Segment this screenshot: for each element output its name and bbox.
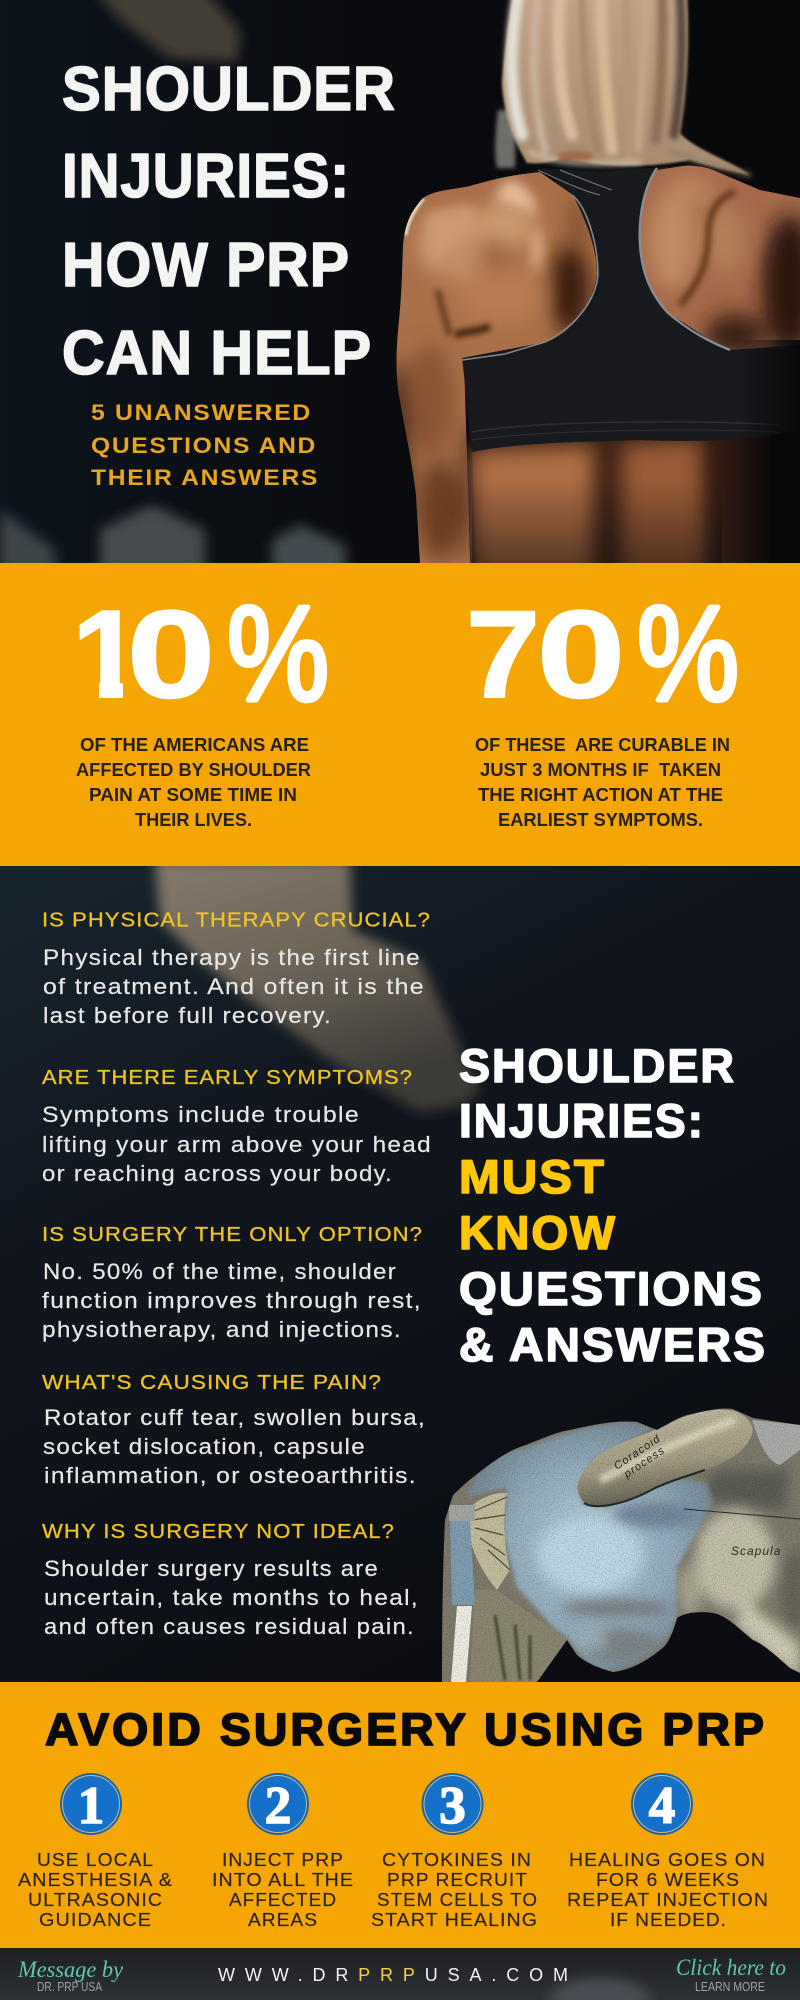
heading: AVOID SURGERY USING PRP — [45, 1704, 767, 1755]
step 2: INTO ALL THE — [212, 1869, 354, 1890]
step 1: USE LOCAL — [37, 1849, 154, 1870]
side heading: & ANSWERS — [459, 1318, 767, 1371]
step 3: STEM CELLS TO — [377, 1889, 538, 1910]
question 3 — [42, 1223, 423, 1342]
message by credit — [17, 1957, 124, 1994]
click here call to action: Click here to — [676, 1955, 786, 1980]
message by credit: Message by — [17, 1957, 124, 1982]
step 2: INJECT PRP — [222, 1849, 344, 1870]
biceps tendon — [450, 1520, 475, 1605]
back skin, right shoulder — [640, 166, 800, 350]
icon: number 3 badge: 3 — [439, 1777, 466, 1835]
panel: questions and answers — [0, 860, 800, 1685]
stat description: curable cases: EARLIEST SYMPTOMS. — [498, 809, 703, 830]
question 4: socket dislocation, capsule — [43, 1434, 366, 1459]
icon: number 1 badge: 1 — [78, 1777, 104, 1835]
footer bokeh — [550, 1978, 650, 2000]
title: CAN HELP — [62, 319, 372, 388]
step 4: HEALING GOES ON — [569, 1849, 766, 1870]
question 5: WHY IS SURGERY NOT IDEAL? — [42, 1520, 395, 1543]
question 4: WHAT'S CAUSING THE PAIN? — [42, 1371, 382, 1394]
stat: 70 percent: 7 — [466, 586, 540, 724]
question 1: of treatment. And often it is the — [43, 974, 425, 999]
website address: WWW.DR PRP USA.COM — [218, 1965, 568, 1985]
title: SHOULDER — [62, 55, 396, 124]
step 3 — [371, 1773, 538, 1930]
question 2: or reaching across your body. — [42, 1161, 393, 1186]
step 4: FOR 6 WEEKS — [596, 1869, 740, 1890]
stat description: Americans affected: PAIN AT SOME TIME IN — [89, 784, 297, 805]
stat: 10 percent: % — [227, 578, 329, 729]
pointer line — [684, 1509, 800, 1519]
subtitle: THEIR ANSWERS — [91, 465, 319, 490]
question 5: Shoulder surgery results are — [44, 1556, 379, 1581]
question 4 — [42, 1371, 426, 1488]
panel: hero photo header — [0, 0, 800, 580]
step 1: ANESTHESIA & — [18, 1869, 173, 1890]
question 2 — [42, 1066, 432, 1186]
step 3: START HEALING — [371, 1909, 538, 1930]
blurred tan bokeh — [155, 860, 480, 1112]
stat: 70 percent: % — [637, 578, 739, 729]
question 3: IS SURGERY THE ONLY OPTION? — [42, 1223, 423, 1246]
hero background — [0, 0, 127, 563]
question 5 — [42, 1520, 419, 1639]
step 3: PRP RECRUIT — [387, 1869, 528, 1890]
side heading: INJURIES: — [459, 1094, 705, 1147]
photo right vignette — [746, 340, 800, 435]
stat description: curable cases — [475, 734, 730, 830]
step 1 — [18, 1773, 173, 1930]
coracoid process — [578, 1410, 753, 1507]
icon: number 4 badge — [631, 1773, 693, 1835]
lower back — [460, 436, 763, 563]
question 1 — [42, 908, 431, 1028]
title: INJURIES: — [62, 142, 350, 211]
stat description: Americans affected: AFFECTED BY SHOULDER — [76, 759, 311, 780]
icon: number 1 badge — [60, 1773, 122, 1835]
scapula crease and arm line — [438, 290, 450, 335]
engraving: shoulder joint bones: process — [621, 1444, 668, 1481]
question 2: ARE THERE EARLY SYMPTOMS? — [42, 1066, 413, 1089]
step 2: AFFECTED — [229, 1889, 337, 1910]
side heading: KNOW — [459, 1206, 617, 1259]
photo: woman's back — [388, 0, 800, 580]
subtitle: QUESTIONS AND — [91, 433, 317, 458]
question 4: Rotator cuff tear, swollen bursa, — [44, 1405, 426, 1430]
panel background — [0, 866, 800, 1576]
left shoulder rim light — [405, 198, 423, 235]
question 2: Symptoms include trouble — [42, 1102, 360, 1127]
icon: number 2 badge: 2 — [265, 1777, 291, 1835]
engraving: shoulder joint bones: Scapula — [731, 1544, 781, 1558]
side heading — [459, 1039, 767, 1371]
question 2: lifting your arm above your head — [42, 1132, 432, 1157]
lower arm muscle — [470, 1590, 567, 1682]
side heading: QUESTIONS — [459, 1262, 764, 1315]
step 2 — [212, 1773, 354, 1930]
footer background — [0, 1948, 800, 2000]
step 4: REPEAT INJECTION — [567, 1889, 769, 1910]
tendon fan — [467, 1493, 510, 1590]
band background — [0, 1682, 800, 1948]
click here call to action: LEARN MORE — [695, 1980, 765, 1994]
humeral head — [467, 1422, 713, 1672]
step 3: CYTOKINES IN — [382, 1849, 532, 1870]
side heading: SHOULDER — [459, 1039, 736, 1092]
side heading: MUST — [459, 1150, 606, 1203]
step 4: IF NEEDED. — [610, 1909, 727, 1930]
question 1: last before full recovery. — [43, 1003, 332, 1028]
hair — [495, 0, 750, 175]
question 1: IS PHYSICAL THERAPY CRUCIAL? — [42, 908, 431, 932]
step 2: AREAS — [248, 1909, 318, 1930]
step 1: ULTRASONIC — [28, 1889, 163, 1910]
stat description: curable cases: OF THESE ARE CURABLE IN — [475, 734, 730, 755]
black sports bra — [462, 165, 800, 452]
engraving grain — [440, 1405, 800, 1685]
icon: number 2 badge — [247, 1773, 309, 1835]
subtitle: 5 UNANSWERED — [91, 400, 312, 425]
engraving: shoulder joint bones — [440, 1405, 800, 1685]
stat description: curable cases: THE RIGHT ACTION AT THE — [478, 784, 723, 805]
panel: footer — [0, 1948, 800, 2000]
icon: number 4 badge: 4 — [649, 1777, 675, 1835]
stat: 10 percent: 0 — [127, 586, 215, 724]
step 4 — [567, 1773, 769, 1930]
scapula shading — [678, 1470, 800, 1680]
question 3: function improves through rest, — [42, 1288, 422, 1313]
stat description: Americans affected: THEIR LIVES. — [135, 809, 252, 830]
question 3: physiotherapy, and injections. — [42, 1317, 402, 1342]
bra trim lines — [462, 195, 598, 360]
click here call to action — [676, 1955, 786, 1994]
bone labels: Coracoid — [612, 1433, 663, 1472]
question 5: uncertain, take months to heal, — [44, 1585, 419, 1610]
blurred gym bokeh lights — [0, 0, 345, 575]
title: HOW PRP — [62, 231, 350, 300]
stat: 70 percent — [466, 578, 739, 729]
panel: avoid surgery steps — [0, 1682, 800, 1948]
panel: statistics band — [0, 563, 800, 866]
message by credit: DR. PRP USA — [37, 1980, 103, 1994]
question 5: and often causes residual pain. — [44, 1614, 415, 1639]
back skin, left shoulder and arm — [396, 172, 597, 563]
band background — [0, 563, 800, 866]
question 3: No. 50% of the time, shoulder — [43, 1259, 397, 1284]
stat description: Americans affected — [76, 734, 311, 830]
stat: 10 percent: 1 — [72, 586, 142, 724]
subtitle — [91, 404, 316, 485]
icon: number 3 badge — [422, 1773, 484, 1835]
stat: 10 percent — [80, 604, 328, 704]
stat description: Americans affected: OF THE AMERICANS ARE — [80, 734, 309, 755]
question 4: inflammation, or osteoarthritis. — [44, 1463, 417, 1488]
bone silhouette — [442, 1408, 800, 1682]
neck glimpse — [557, 151, 593, 161]
stat: 70 percent: 0 — [537, 586, 625, 724]
step 1: GUIDANCE — [39, 1909, 152, 1930]
stat description: curable cases: JUST 3 MONTHS IF TAKEN — [480, 759, 721, 780]
title — [62, 55, 396, 388]
ligament stripes — [752, 1420, 800, 1465]
question 1: Physical therapy is the first line — [43, 945, 421, 970]
